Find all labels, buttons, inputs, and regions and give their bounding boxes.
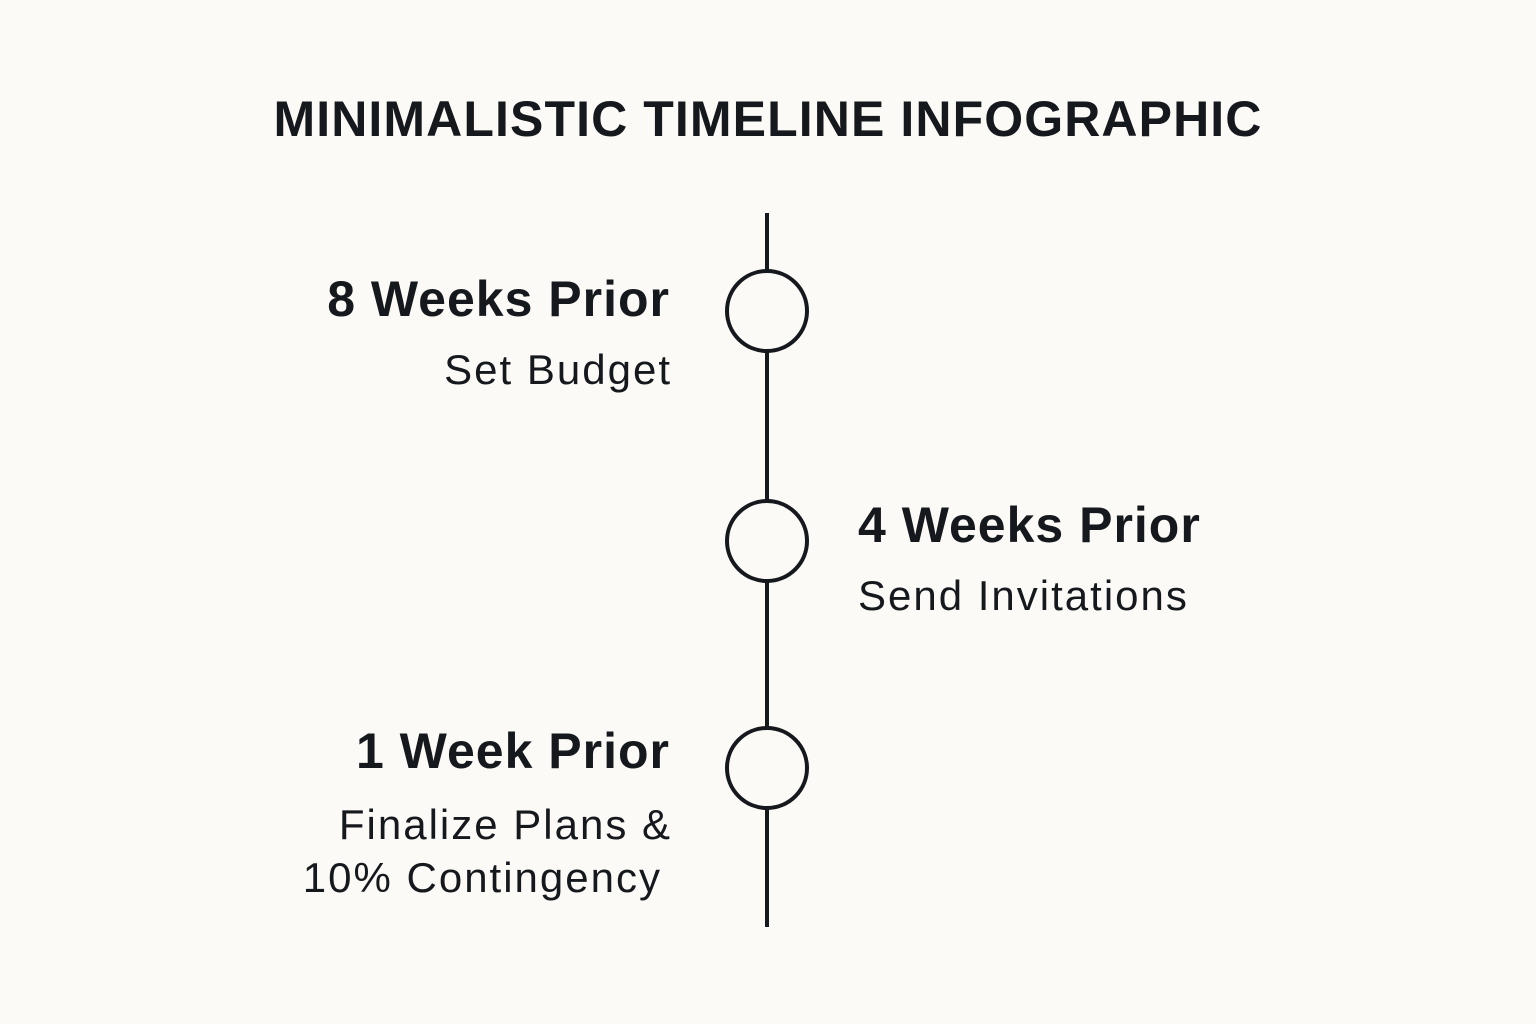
- title: MINIMALISTIC TIMELINE INFOGRAPHIC: [273, 91, 1263, 147]
- step 3 text: Finalize Plans &: [339, 801, 672, 848]
- step 1: [327, 271, 672, 393]
- step 3 text: 10% Contingency: [303, 854, 662, 901]
- step 1 heading: 8 Weeks Prior: [327, 271, 670, 327]
- step 2 heading: 4 Weeks Prior: [858, 497, 1201, 553]
- step 2 text: Send Invitations: [858, 572, 1189, 619]
- step 2: [858, 497, 1201, 619]
- step 3 text: [303, 801, 672, 901]
- step 1 text: Set Budget: [444, 346, 672, 393]
- step 3 heading: 1 Week Prior: [356, 723, 670, 779]
- step 3: [303, 723, 672, 901]
